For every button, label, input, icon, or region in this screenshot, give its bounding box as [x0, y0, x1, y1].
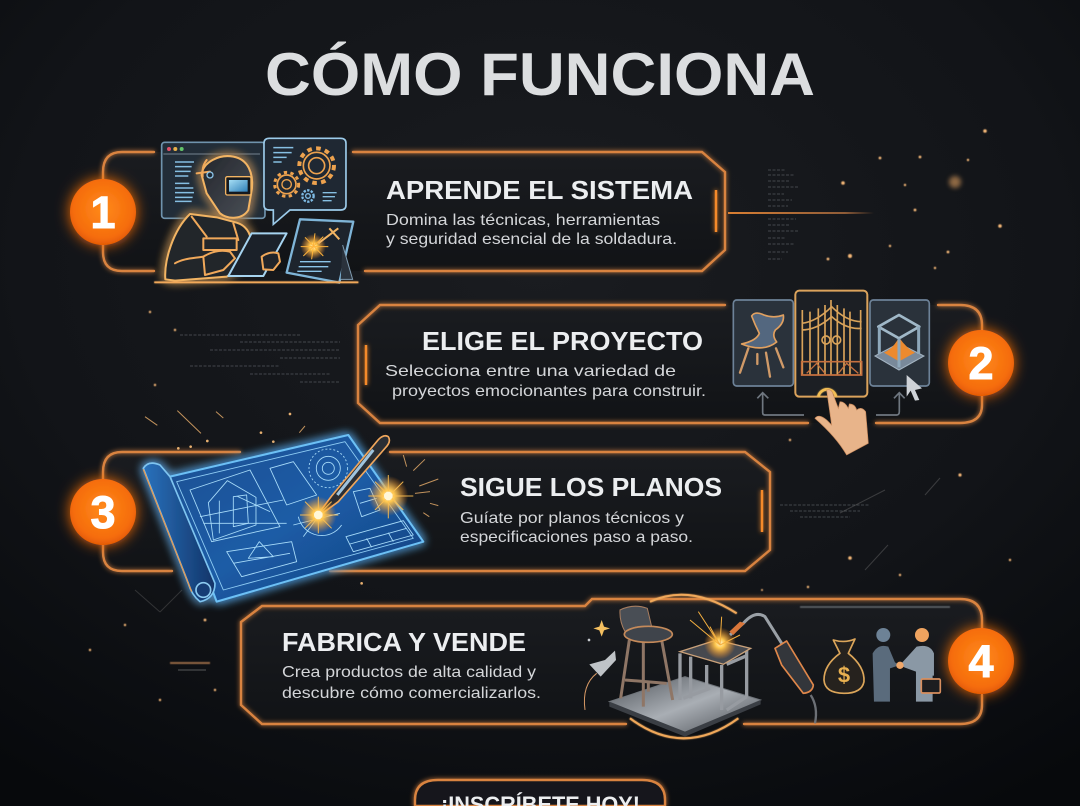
text: sigue description: Guíate por planos técnicos y — [460, 510, 684, 527]
text: fabrica description: descubre cómo comercializarlos. — [282, 685, 541, 702]
step number 4 — [948, 628, 1014, 694]
decorative particles and code lines — [89, 129, 1011, 701]
text: aprende description: y seguridad esencial de la soldadura. — [386, 231, 677, 248]
panel: step 2 elige el proyecto — [358, 291, 1014, 455]
panel: step 1 aprende el sistema — [70, 138, 725, 283]
step number 3 — [70, 479, 136, 545]
step number 4: 4 — [968, 636, 994, 687]
panel: step 3 sigue los planos — [70, 411, 770, 602]
icon: furniture, welding torch, sale handshake: $ — [838, 662, 850, 687]
call to action button — [415, 780, 665, 806]
text: sigue description: especificaciones paso a paso. — [460, 529, 693, 546]
icon: welder learning with screens — [154, 138, 358, 283]
step number 1 — [70, 179, 136, 245]
step number 1: 1 — [90, 187, 116, 238]
step number 2 — [948, 330, 1014, 396]
text: elige description: Selecciona entre una variedad de — [385, 363, 676, 380]
icon: blueprint with pen and sparks — [143, 411, 438, 602]
panel: step 4 fabrica y vende — [241, 595, 1014, 738]
step number 2: 2 — [968, 338, 994, 389]
text: elige description: proyectos emocionantes para construir. — [392, 383, 706, 400]
text: fabrica description: Crea productos de alta calidad y — [282, 664, 536, 681]
heading: aprende el sistema: APRENDE EL SISTEMA — [386, 175, 693, 205]
heading: fabrica y vende: FABRICA Y VENDE — [282, 627, 526, 657]
step number 3: 3 — [90, 487, 116, 538]
heading: sigue los planos: SIGUE LOS PLANOS — [460, 472, 722, 502]
icon: project selection cards with hand — [733, 291, 929, 455]
title: CÓMO FUNCIONA — [265, 41, 815, 108]
text: aprende description: Domina las técnicas, herramientas — [386, 212, 660, 229]
icon: furniture, welding torch, sale handshake — [584, 595, 940, 738]
heading: elige el proyecto: ELIGE EL PROYECTO — [422, 326, 703, 356]
